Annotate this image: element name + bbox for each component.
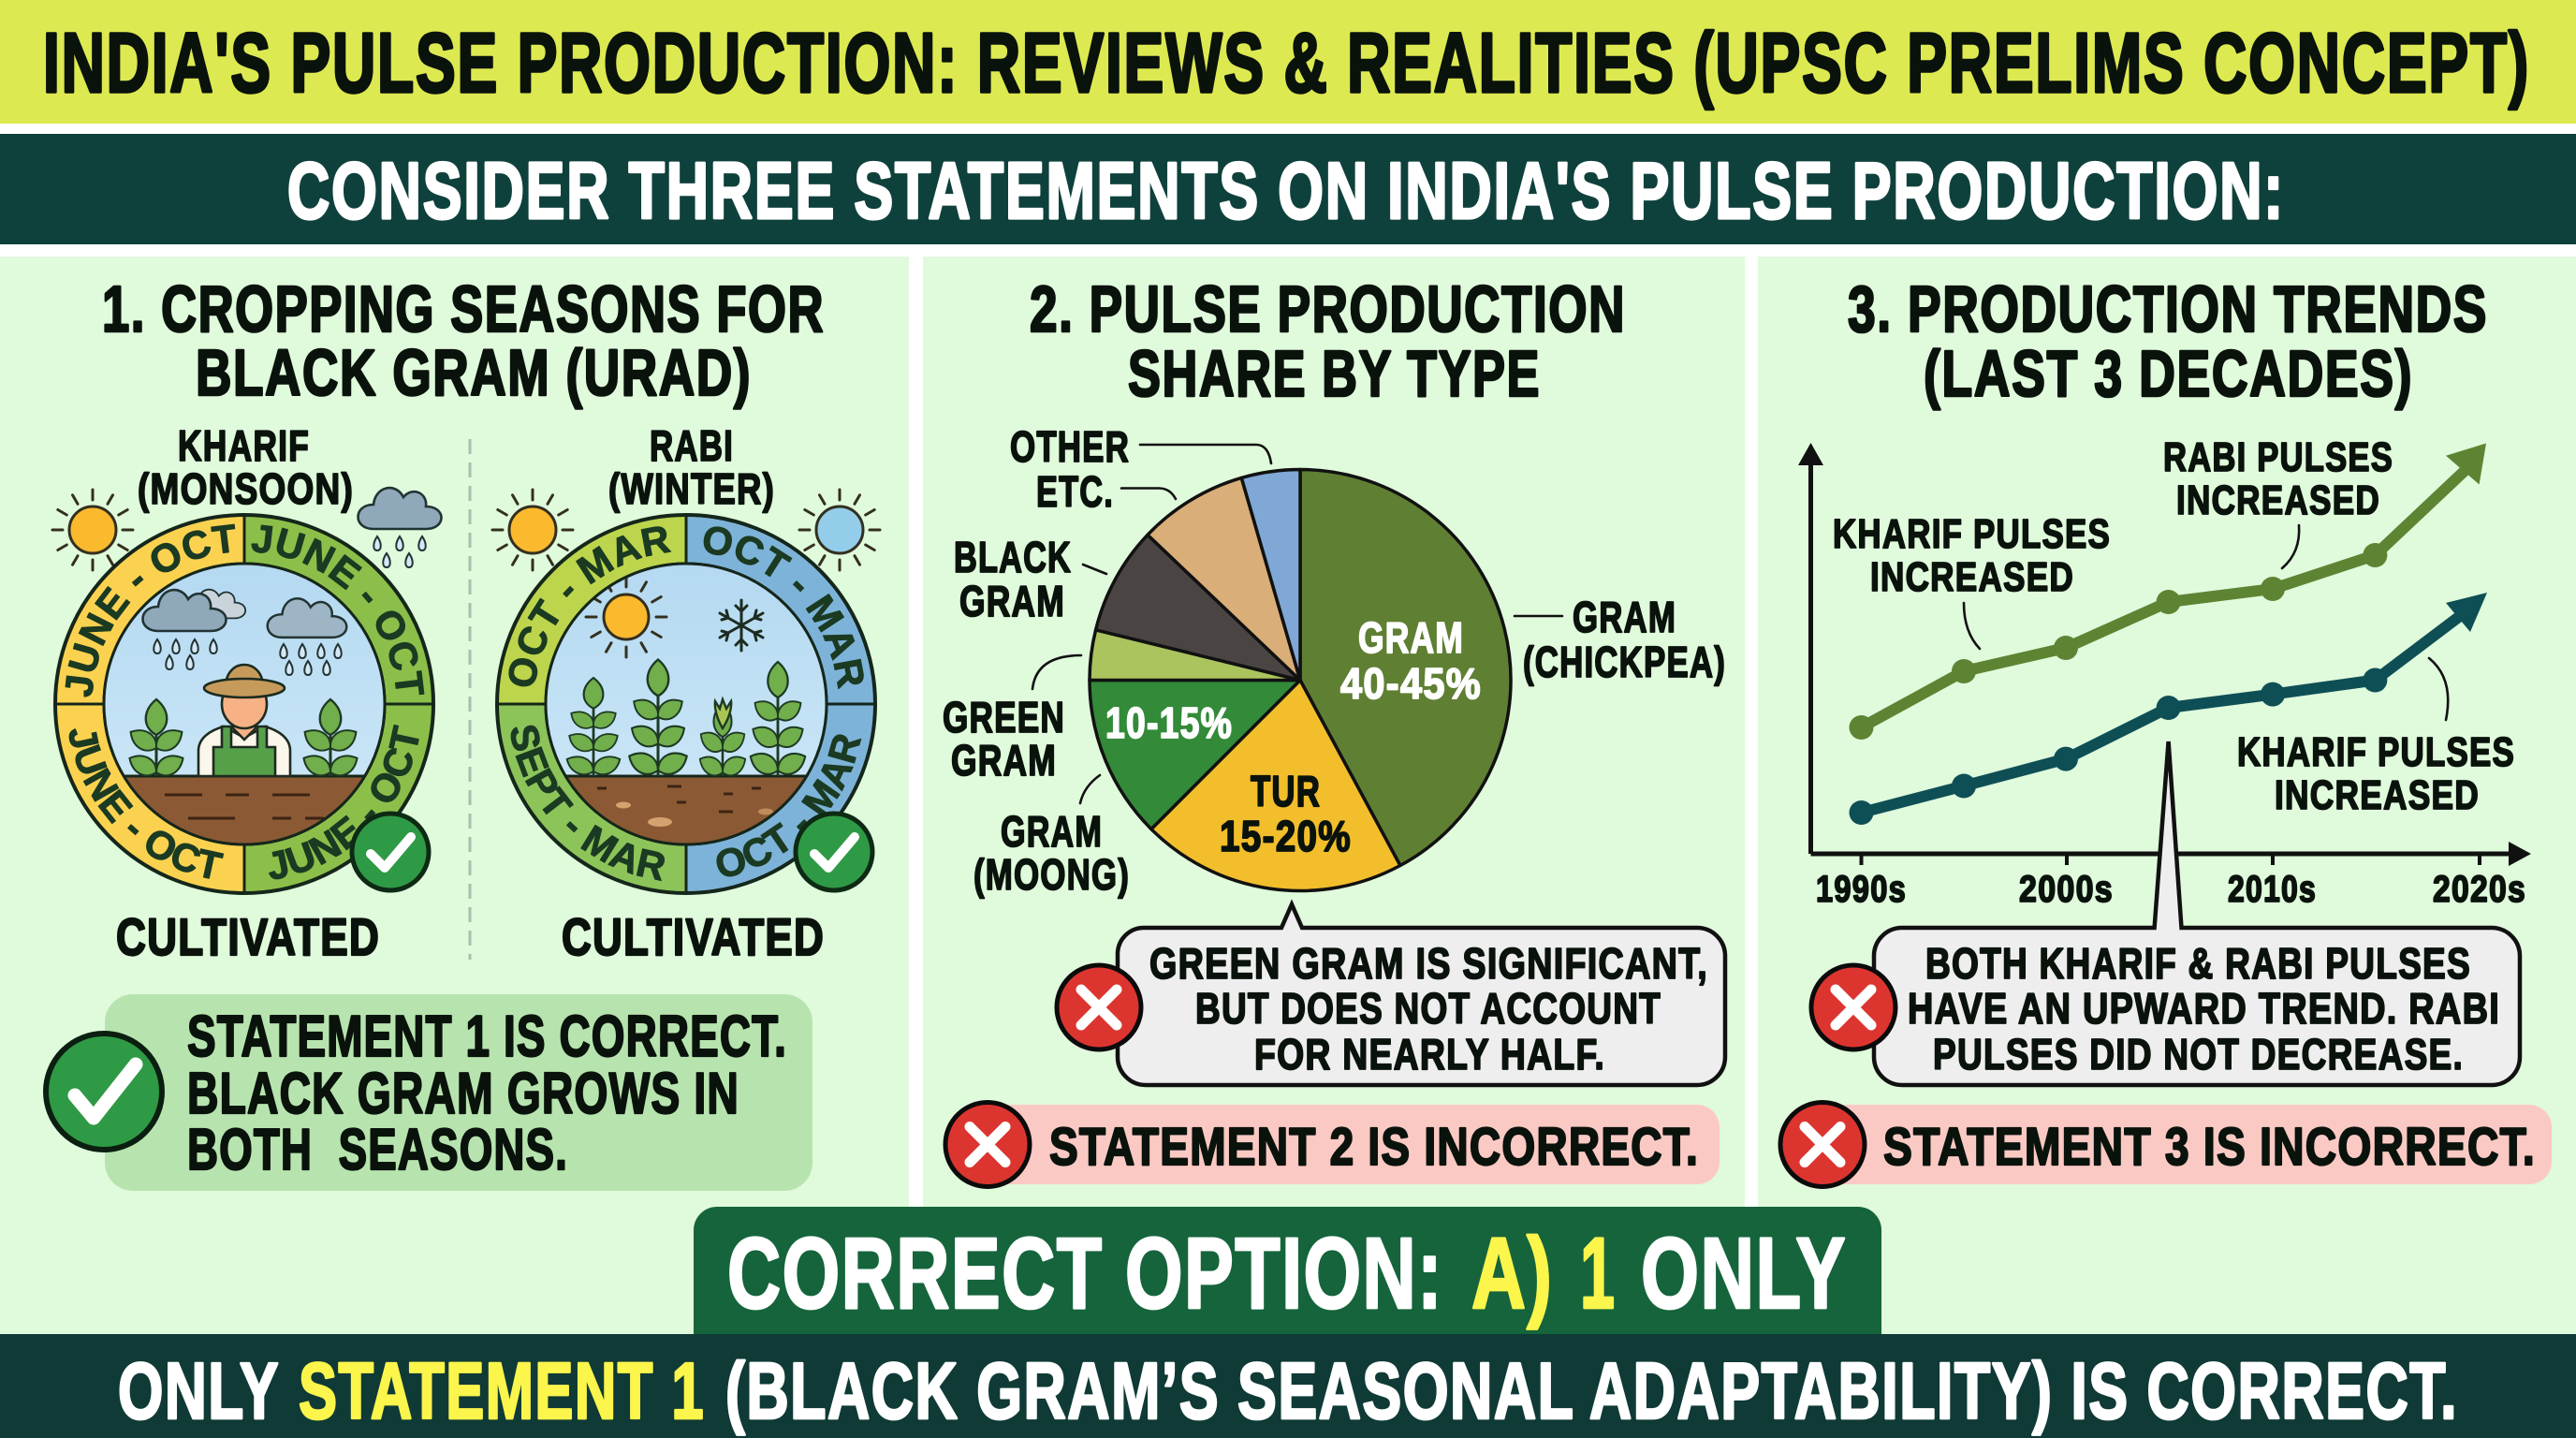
ring month labels: JUNE - OCT <box>251 524 425 695</box>
lower panel background <box>0 257 2576 1334</box>
pie value labels: 15-20% <box>1220 812 1352 860</box>
callout: green gram note: BUT DOES NOT ACCOUNT <box>1195 984 1661 1033</box>
label: cultivated rabi: CULTIVATED <box>562 907 825 966</box>
scene: monsoon farmer <box>104 564 385 851</box>
heading: panel 3: (LAST 3 DECADES) <box>1924 337 2413 410</box>
callout: trend note <box>1874 741 2520 1085</box>
label: kharif pulses upper <box>1833 511 2111 649</box>
pie value labels: TUR <box>1251 767 1321 815</box>
label: kharif pulses upper: INCREASED <box>1870 554 2074 600</box>
label: kharif pulses upper: KHARIF PULSES <box>1833 511 2111 557</box>
verdict: statement 3 <box>1780 1103 2552 1187</box>
label: kharif: (MONSOON) <box>138 464 354 513</box>
callout: statement 1 correct: BOTH SEASONS. <box>187 1118 568 1182</box>
axis labels <box>1816 869 2526 910</box>
pie chart <box>1090 470 1511 891</box>
pie leader lines <box>1032 445 1562 803</box>
callout: statement 1 correct: BLACK GRAM GROWS IN <box>187 1062 739 1126</box>
ring month labels <box>508 526 864 882</box>
label: kharif: KHARIF <box>178 421 310 470</box>
heading: panel 1: 1. CROPPING SEASONS FOR <box>102 272 825 345</box>
conclusion banner: ONLY <box>118 1347 280 1436</box>
label: kharif <box>138 421 354 513</box>
pie outer labels: GREEN <box>943 693 1065 741</box>
diagram: rabi ring <box>495 513 877 895</box>
pie outer labels <box>943 422 1726 899</box>
icon: rain cloud <box>358 488 442 567</box>
pie value labels <box>1105 613 1482 860</box>
axis labels: 1990s <box>1816 869 1907 910</box>
icon: kharif check <box>352 814 429 890</box>
pie outer labels: (CHICKPEA) <box>1523 638 1726 686</box>
pie outer labels: GRAM <box>951 736 1057 785</box>
answer banner: A) <box>1471 1216 1553 1329</box>
pie value labels: 10-15% <box>1105 698 1233 747</box>
icon: cold sun <box>799 490 880 570</box>
label: rabi: RABI <box>650 421 734 470</box>
label: rabi pulses <box>2163 434 2393 568</box>
icon: rabi sun <box>492 490 573 570</box>
pie outer labels: GRAM <box>959 577 1065 625</box>
pie outer labels: (MOONG) <box>973 850 1130 899</box>
line: lower teal series <box>1850 593 2487 825</box>
icon: rabi check <box>796 814 872 890</box>
axis labels: 2010s <box>2228 869 2317 910</box>
pie outer labels: OTHER <box>1010 422 1130 471</box>
label: rabi pulses: INCREASED <box>2176 477 2380 523</box>
conclusion banner <box>0 1334 2576 1438</box>
answer banner: 1 <box>1580 1216 1616 1329</box>
label: cultivated kharif: CULTIVATED <box>116 907 380 966</box>
pie value labels: 40-45% <box>1340 659 1482 708</box>
pie outer labels: GRAM <box>1001 807 1103 856</box>
ring month labels: JUNE - OCT <box>66 524 236 697</box>
scene: winter crops <box>546 564 827 851</box>
callout: statement 1 correct: STATEMENT 1 IS CORRECT. <box>187 1005 787 1069</box>
pie outer labels: GRAM <box>1573 593 1676 641</box>
icon: cross on note <box>1057 965 1141 1049</box>
heading: panel 2: SHARE BY TYPE <box>1128 337 1541 410</box>
ring month labels: SEPT - MAR <box>511 725 665 882</box>
ring month labels: JUNE - OCT <box>269 725 419 880</box>
pie value labels: GRAM <box>1358 613 1464 662</box>
heading: panel 2 <box>1030 272 1626 410</box>
heading: panel 1: BLACK GRAM (URAD) <box>196 336 752 409</box>
axis labels: 2020s <box>2433 869 2526 910</box>
heading: panel 2: 2. PULSE PRODUCTION <box>1030 272 1626 345</box>
answer banner: CORRECT OPTION: <box>727 1216 1443 1329</box>
pie outer labels: ETC. <box>1036 467 1114 516</box>
panel: cropping seasons <box>43 272 882 1191</box>
figure: farmer <box>198 665 290 776</box>
icon: cross on trend note <box>1811 965 1895 1049</box>
ring month labels <box>66 524 425 880</box>
callout: green gram note: GREEN GRAM IS SIGNIFICANT, <box>1149 939 1708 988</box>
ring month labels: OCT - MAR <box>508 526 672 687</box>
label: rabi <box>608 421 775 513</box>
axis labels: 2000s <box>2019 869 2114 910</box>
verdict: statement 2: STATEMENT 2 IS INCORRECT. <box>1049 1117 1699 1177</box>
ring month labels: OCT - MAR <box>716 734 861 876</box>
conclusion banner: STATEMENT 1 <box>299 1347 705 1436</box>
verdict: statement 2 <box>945 1103 1720 1187</box>
label: kharif pulses lower <box>2237 658 2515 818</box>
answer banner: ONLY <box>1641 1216 1847 1329</box>
label: rabi: (WINTER) <box>608 464 775 513</box>
callout: statement 1 correct <box>46 994 812 1191</box>
pie outer labels: BLACK <box>954 533 1072 581</box>
panel: share by type <box>943 272 1726 1187</box>
ring month labels: JUNE - OCT <box>69 728 225 879</box>
icon: kharif sun <box>52 490 133 570</box>
heading: panel 3 <box>1848 272 2488 410</box>
ring month labels: OCT - MAR <box>704 526 864 689</box>
label: rabi pulses: RABI PULSES <box>2163 434 2393 480</box>
line: upper green series <box>1850 444 2486 740</box>
chart axes <box>1798 443 2531 866</box>
callout: trend note: PULSES DID NOT DECREASE. <box>1933 1030 2464 1078</box>
callout: green gram note: FOR NEARLY HALF. <box>1254 1030 1605 1078</box>
panel: production trends <box>1780 272 2552 1187</box>
heading: panel 1 <box>102 272 825 409</box>
label: kharif pulses lower: INCREASED <box>2275 772 2480 818</box>
diagram: kharif ring <box>53 513 435 895</box>
callout: green gram note <box>1118 904 1725 1085</box>
